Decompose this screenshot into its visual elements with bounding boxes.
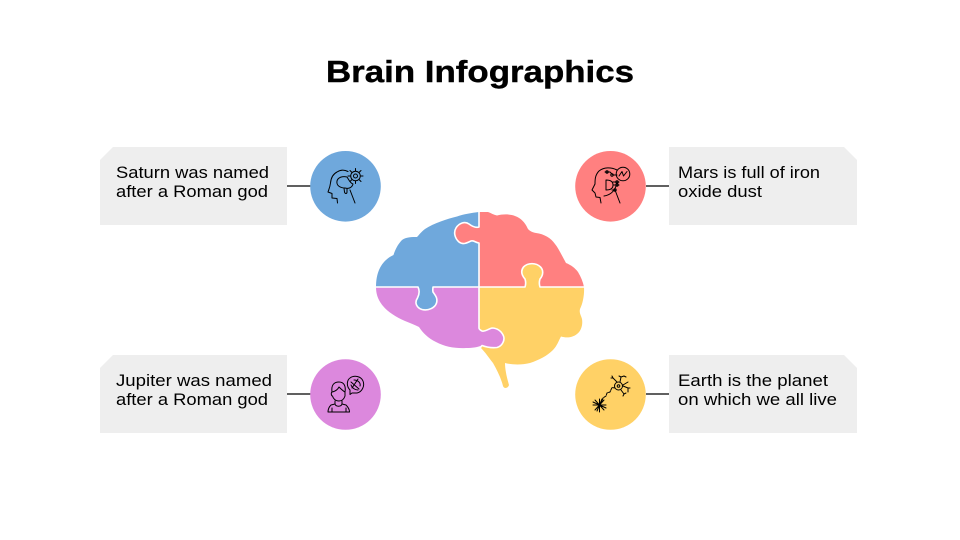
text box bbox=[100, 355, 287, 433]
panel: Earth bbox=[669, 355, 857, 433]
connector: Mars bbox=[646, 185, 669, 187]
panel: Jupiter bbox=[100, 355, 287, 433]
text block: Earth is the planet bbox=[678, 371, 828, 390]
brain piece: purple bbox=[376, 287, 504, 348]
panel: Saturn bbox=[100, 147, 287, 225]
text block: Saturn was named bbox=[116, 163, 269, 182]
circle: blue bbox=[310, 151, 381, 222]
text block: Jupiter line 2: after a Roman god bbox=[116, 390, 268, 409]
title: Brain Infographics bbox=[326, 55, 634, 89]
circle: yellow bbox=[575, 359, 646, 430]
connector: Saturn bbox=[287, 185, 311, 187]
circle: red bbox=[575, 151, 646, 222]
text box bbox=[669, 147, 857, 225]
icon: person with speech bubble bbox=[328, 376, 364, 412]
icon: head with circuits bbox=[592, 167, 630, 203]
icon: head with gear bbox=[328, 168, 363, 203]
icon: neuron bbox=[593, 376, 630, 412]
panel: Mars bbox=[669, 147, 857, 225]
brain piece: blue bbox=[376, 212, 479, 310]
brain puzzle bbox=[375, 211, 585, 388]
text box bbox=[669, 355, 857, 433]
text block: Mars is full of iron bbox=[678, 163, 820, 182]
brain piece: yellow bbox=[479, 264, 584, 388]
text block: Saturn line 2: after a Roman god bbox=[116, 182, 268, 201]
text block: Earth line 2: on which we all live bbox=[678, 390, 837, 409]
brain piece: red bbox=[455, 212, 584, 287]
connector: Earth bbox=[646, 393, 669, 395]
connector: Jupiter bbox=[287, 393, 311, 395]
circle: purple bbox=[310, 359, 381, 430]
text block: Jupiter was named bbox=[116, 371, 272, 390]
puzzle seams bbox=[375, 211, 585, 348]
text box bbox=[100, 147, 287, 225]
text block: Mars line 2: oxide dust bbox=[678, 182, 762, 201]
